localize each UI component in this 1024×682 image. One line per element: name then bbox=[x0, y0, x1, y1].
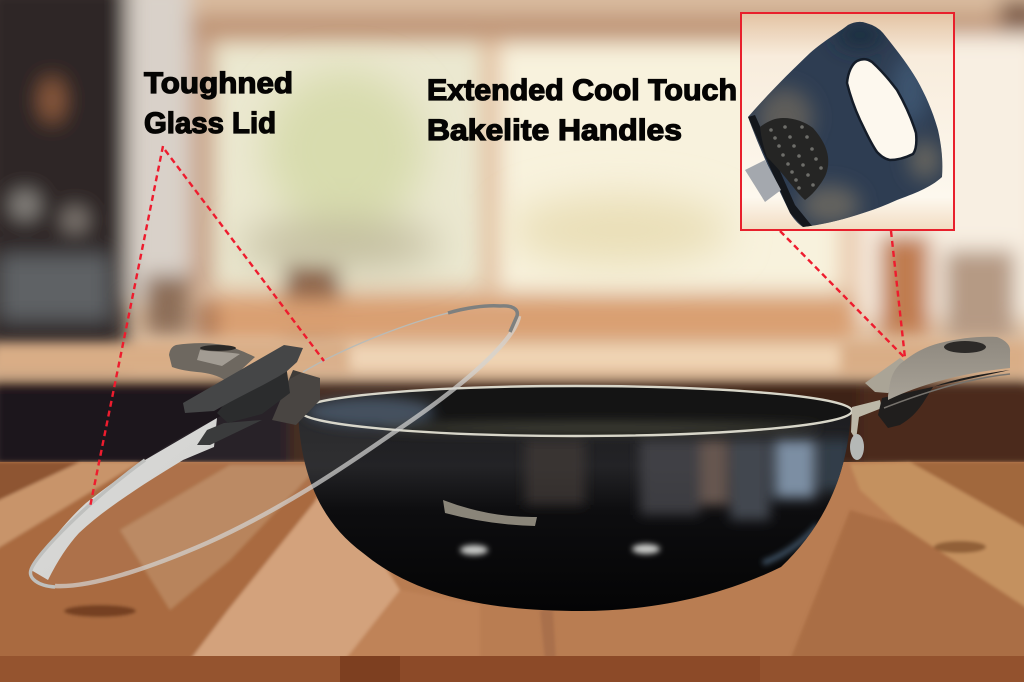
lid knob bbox=[183, 345, 303, 445]
lid lower rim bbox=[55, 316, 519, 586]
handle grip bbox=[760, 118, 828, 200]
label: Extended Cool Touch Bakelite Handles: Bakelite Handles bbox=[427, 114, 682, 147]
handle hole bbox=[847, 59, 916, 160]
handle tab bbox=[745, 160, 781, 202]
wooden table top bbox=[0, 462, 1024, 682]
right pan handle bbox=[850, 337, 1010, 460]
label: Toughned Glass Lid: Glass Lid bbox=[144, 107, 276, 140]
label: Extended Cool Touch Bakelite Handles: Extended Cool Touch bbox=[427, 74, 737, 107]
pan reflections bbox=[443, 440, 852, 563]
label: Toughned Glass Lid: Toughned bbox=[144, 67, 293, 100]
leader lines: handle bbox=[780, 231, 905, 358]
pan rim bbox=[300, 386, 852, 436]
glass lid bbox=[30, 304, 519, 587]
pan interior bbox=[300, 386, 852, 436]
pan body bbox=[298, 410, 851, 611]
lid top rim bbox=[448, 306, 517, 332]
lid left band bbox=[31, 418, 217, 580]
handle close-up bbox=[748, 22, 942, 227]
lid thin upper edge bbox=[303, 313, 448, 372]
lid left edge bbox=[30, 460, 145, 587]
leader lines: lid bbox=[90, 146, 324, 507]
blurred kitchen background bbox=[0, 0, 1024, 470]
callout inset: handle close-up bbox=[740, 13, 954, 230]
grip dots bbox=[769, 125, 823, 190]
left pan handle bbox=[169, 343, 320, 425]
lid glass bbox=[30, 304, 519, 587]
inset frame bbox=[741, 13, 954, 230]
pan bbox=[298, 386, 852, 611]
